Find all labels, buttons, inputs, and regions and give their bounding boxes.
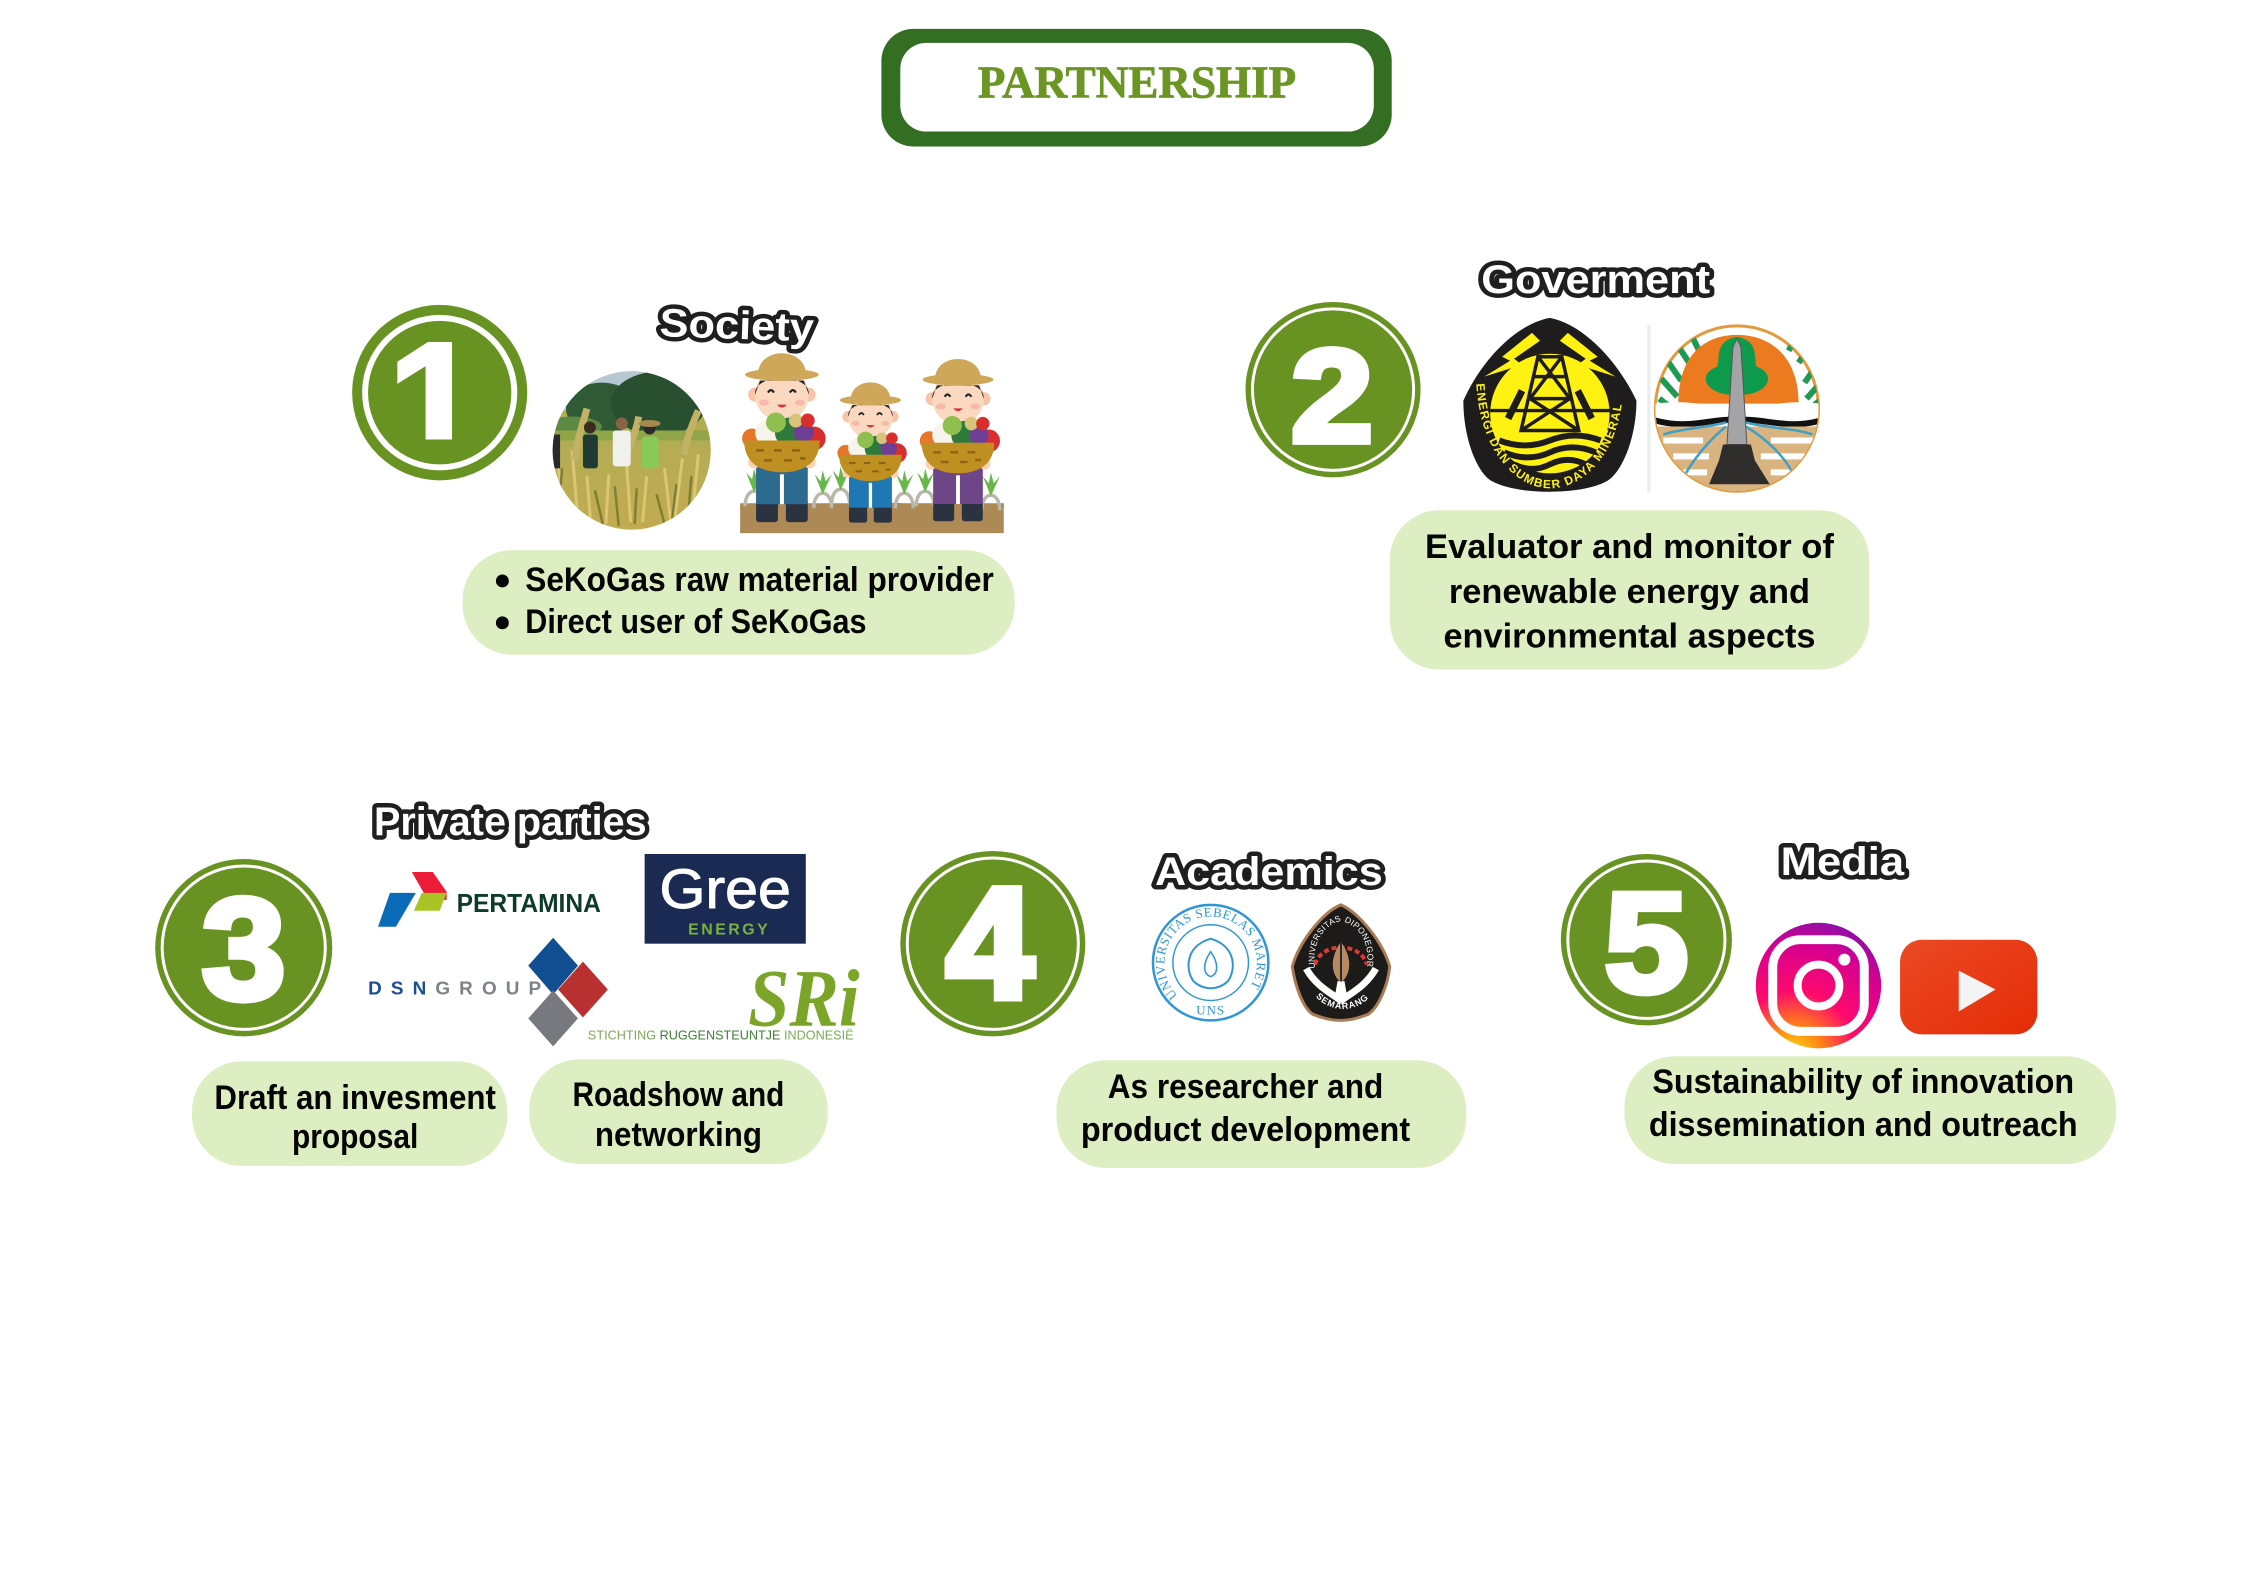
description pill: renewable energy and [1449, 573, 1810, 611]
logo: Gree Energy: ENERGY [688, 922, 770, 939]
logo: SRi foundation [588, 952, 860, 1043]
number badge 3 [155, 859, 332, 1036]
description pill [1056, 1060, 1466, 1168]
logo: Universitas Diponegoro [1290, 903, 1392, 1022]
divider between logos [1647, 325, 1650, 492]
number badge 5 [1561, 854, 1732, 1025]
description pill: dissemination and outreach [1649, 1106, 2078, 1144]
logo: energy ministry crest: ENERGI DAN SUMBER DAYA MINERAL [1476, 384, 1622, 488]
logo: Gree Energy: Gree [660, 858, 791, 920]
logo: Pertamina: PERTAMINA [457, 890, 601, 918]
icon: Instagram [1756, 923, 1881, 1048]
heading: Private parties: Private parties [374, 800, 647, 844]
description pill: product development [1081, 1111, 1410, 1149]
logo: SRi foundation: STICHTING RUGGENSTEUNTJE INDONESIË [588, 1028, 854, 1042]
number badge 4 [900, 851, 1085, 1036]
description pill [1625, 1056, 2116, 1164]
description pill: investment proposal: proposal [292, 1118, 418, 1156]
number badge 4: 4 [946, 856, 1034, 1032]
description pill: Sustainability of innovation [1652, 1063, 2074, 1101]
logo: DSN Group [368, 938, 608, 1046]
heading: Society: Society [659, 301, 815, 351]
photo: farmers in rice field [542, 371, 711, 530]
description pill: investment proposal [192, 1061, 507, 1166]
description pill: roadshow [529, 1059, 828, 1164]
description pill: SeKoGas raw material provider [525, 561, 994, 599]
number badge 2 [1245, 302, 1421, 477]
number badge 3: 3 [202, 869, 286, 1030]
description pill: As researcher and [1108, 1068, 1383, 1106]
logo: DSN Group: DSN GROUP [368, 978, 541, 1000]
logo: energy ministry crest [1463, 318, 1636, 492]
heading: Media: Media [1781, 840, 1905, 884]
logo: Pertamina [378, 872, 601, 927]
logo: Universitas Sebelas Maret: UNIVERSITAS SEBELAS MARET [1156, 908, 1266, 1001]
panel: society [352, 301, 1015, 655]
description pill [463, 550, 1015, 655]
logo: Universitas Diponegoro: UNIVERSITAS DIPONEGORO [1308, 916, 1374, 968]
description pill: environmental aspects [1443, 618, 1816, 656]
description pill: roadshow: Roadshow and [573, 1076, 784, 1114]
panel: academics [900, 850, 1466, 1168]
infographic canvas [155, 28, 2116, 1168]
description pill: Direct user of SeKoGas [525, 603, 866, 641]
title text: PARTNERSHIP [978, 57, 1296, 108]
logo: Universitas Sebelas Maret: UNS [1196, 1002, 1225, 1017]
heading: Goverment: Goverment [1481, 258, 1710, 302]
number badge 5: 5 [1605, 863, 1688, 1022]
number badge 1: 1 [387, 307, 482, 498]
panel: government [1246, 258, 1870, 670]
description pill: investment proposal: Draft an invesment [214, 1079, 496, 1117]
number badge 1 [352, 305, 527, 498]
panel: media [1561, 840, 2116, 1164]
description pill [1390, 510, 1869, 670]
title badge [881, 29, 1392, 146]
logo: Gree Energy [645, 854, 806, 944]
logo: SRi foundation: SRi [748, 952, 860, 1043]
description pill: Evaluator and monitor of [1425, 528, 1835, 566]
illustration: farmers with vegetable baskets [740, 353, 1004, 533]
panel: private parties [155, 800, 860, 1166]
heading: Academics: Academics [1155, 850, 1383, 894]
icon: YouTube [1900, 940, 2037, 1034]
infographic content [155, 28, 2116, 1168]
logo: environment ministry crest [1655, 326, 1822, 494]
logo: Universitas Diponegoro: SEMARANG [1316, 993, 1368, 1010]
description pill: roadshow: networking [595, 1116, 762, 1154]
number badge 2: 2 [1291, 322, 1373, 469]
